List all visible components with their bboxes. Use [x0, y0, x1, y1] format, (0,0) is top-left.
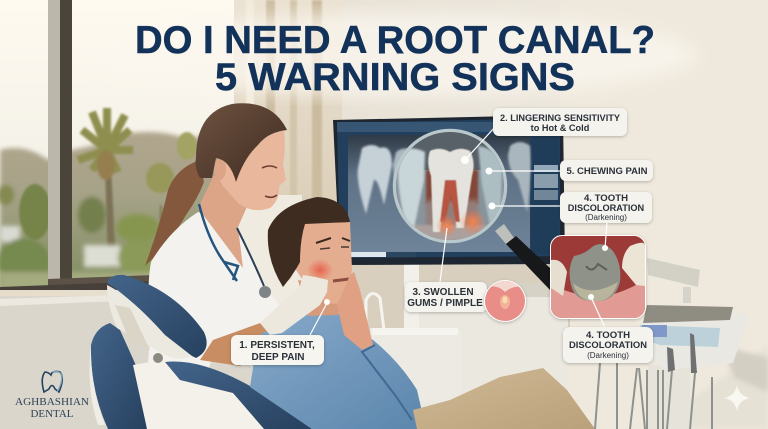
headrest [107, 275, 207, 358]
hoses [595, 363, 712, 429]
callout 4: tooth discoloration lower: (Darkening) [587, 351, 629, 360]
instrument tray [643, 305, 733, 323]
shirt folds and cuff [362, 345, 412, 420]
callout 5: chewing pain: 5. CHEWING PAIN [566, 166, 648, 177]
magnifying glass over tooth root [394, 130, 550, 290]
title haze [95, 13, 695, 97]
icon: tooth outline [42, 371, 62, 392]
monitor with dental x-ray [333, 115, 565, 265]
forearm [200, 322, 278, 366]
window sill [0, 291, 236, 306]
callout 4: tooth discoloration lower: 4. TOOTH [586, 330, 630, 341]
title: 5 WARNING SIGNS [215, 56, 575, 99]
body shirt [250, 312, 426, 429]
control panel [640, 325, 720, 347]
face [216, 128, 286, 210]
callout 2: lingering sensitivity [461, 108, 627, 164]
dentist [142, 103, 290, 429]
callout 5: chewing pain [486, 160, 653, 181]
hair [196, 103, 287, 182]
callout 3: swollen gums with pimple inset: GUMS / PIMPLE [407, 298, 483, 309]
brows, eyes and mouth [316, 238, 350, 281]
ear [214, 158, 226, 180]
neck [298, 280, 345, 316]
palm trees [18, 106, 197, 247]
window with palm tree view [0, 0, 236, 299]
title: DO I NEED A ROOT CANAL? [135, 19, 655, 62]
callout 1: persistent deep pain: 1. PERSISTENT, [239, 340, 315, 351]
callout 2: lingering sensitivity: 2. LINGERING SENSITIVITY [500, 113, 620, 123]
logo: Aghbashian Dental: AGHBASHIAN [15, 397, 89, 408]
title [135, 19, 655, 99]
arm [647, 258, 700, 287]
gloved hand [260, 275, 328, 335]
callout 4: tooth discoloration lower: DISCOLORATION [569, 339, 647, 350]
handle [495, 224, 514, 244]
stethoscope [199, 204, 271, 298]
logo: Aghbashian Dental: DENTAL [30, 409, 74, 420]
icon: darkened molar [570, 244, 620, 301]
logo: Aghbashian Dental [15, 371, 89, 420]
inset: discolored molar [550, 235, 646, 319]
seat [133, 361, 310, 429]
face [296, 222, 352, 304]
console [640, 313, 748, 370]
icon: x-ray teeth [358, 142, 531, 218]
dental unit [595, 258, 748, 429]
callout 2: lingering sensitivity: to Hot & Cold [531, 123, 589, 133]
chair back [91, 323, 147, 429]
dental chair [90, 275, 312, 429]
callout 4: tooth discoloration lower [563, 223, 653, 363]
eye and mouth [262, 166, 277, 197]
column [648, 365, 690, 429]
callout 3: swollen gums with pimple inset: 3. SWOLLEN [412, 287, 474, 298]
callout 1: persistent deep pain: DEEP PAIN [252, 352, 304, 363]
callout 4: tooth discoloration upper [488, 192, 652, 223]
trousers [413, 368, 595, 429]
label 3 pointer line [440, 228, 447, 282]
neck [198, 175, 250, 268]
icon: side teeth [398, 146, 502, 228]
callout 3: swollen gums with pimple inset [405, 280, 526, 322]
cabinet and sink [366, 293, 461, 402]
red pain area on cheek [307, 259, 333, 281]
ponytail [145, 160, 204, 266]
ear [279, 259, 293, 281]
curtains [234, 0, 342, 320]
window frame [0, 0, 150, 290]
hand on cheek [337, 272, 373, 350]
monitor stand [404, 262, 419, 332]
patient [250, 197, 595, 429]
background trees and buildings [0, 183, 159, 287]
handpieces [667, 333, 697, 373]
hair [268, 197, 350, 287]
icon: central molar with red pulp [428, 149, 474, 232]
callout 4: tooth discoloration upper: DISCOLORATION [568, 203, 645, 213]
scrub top [142, 212, 290, 429]
sparkle [724, 385, 750, 411]
callout 4: tooth discoloration upper: 4. TOOTH [584, 193, 628, 204]
callout 1: persistent deep pain [231, 299, 330, 365]
callout 4: tooth discoloration upper: (Darkening) [585, 213, 627, 222]
icon: adjacent teeth [551, 243, 645, 296]
